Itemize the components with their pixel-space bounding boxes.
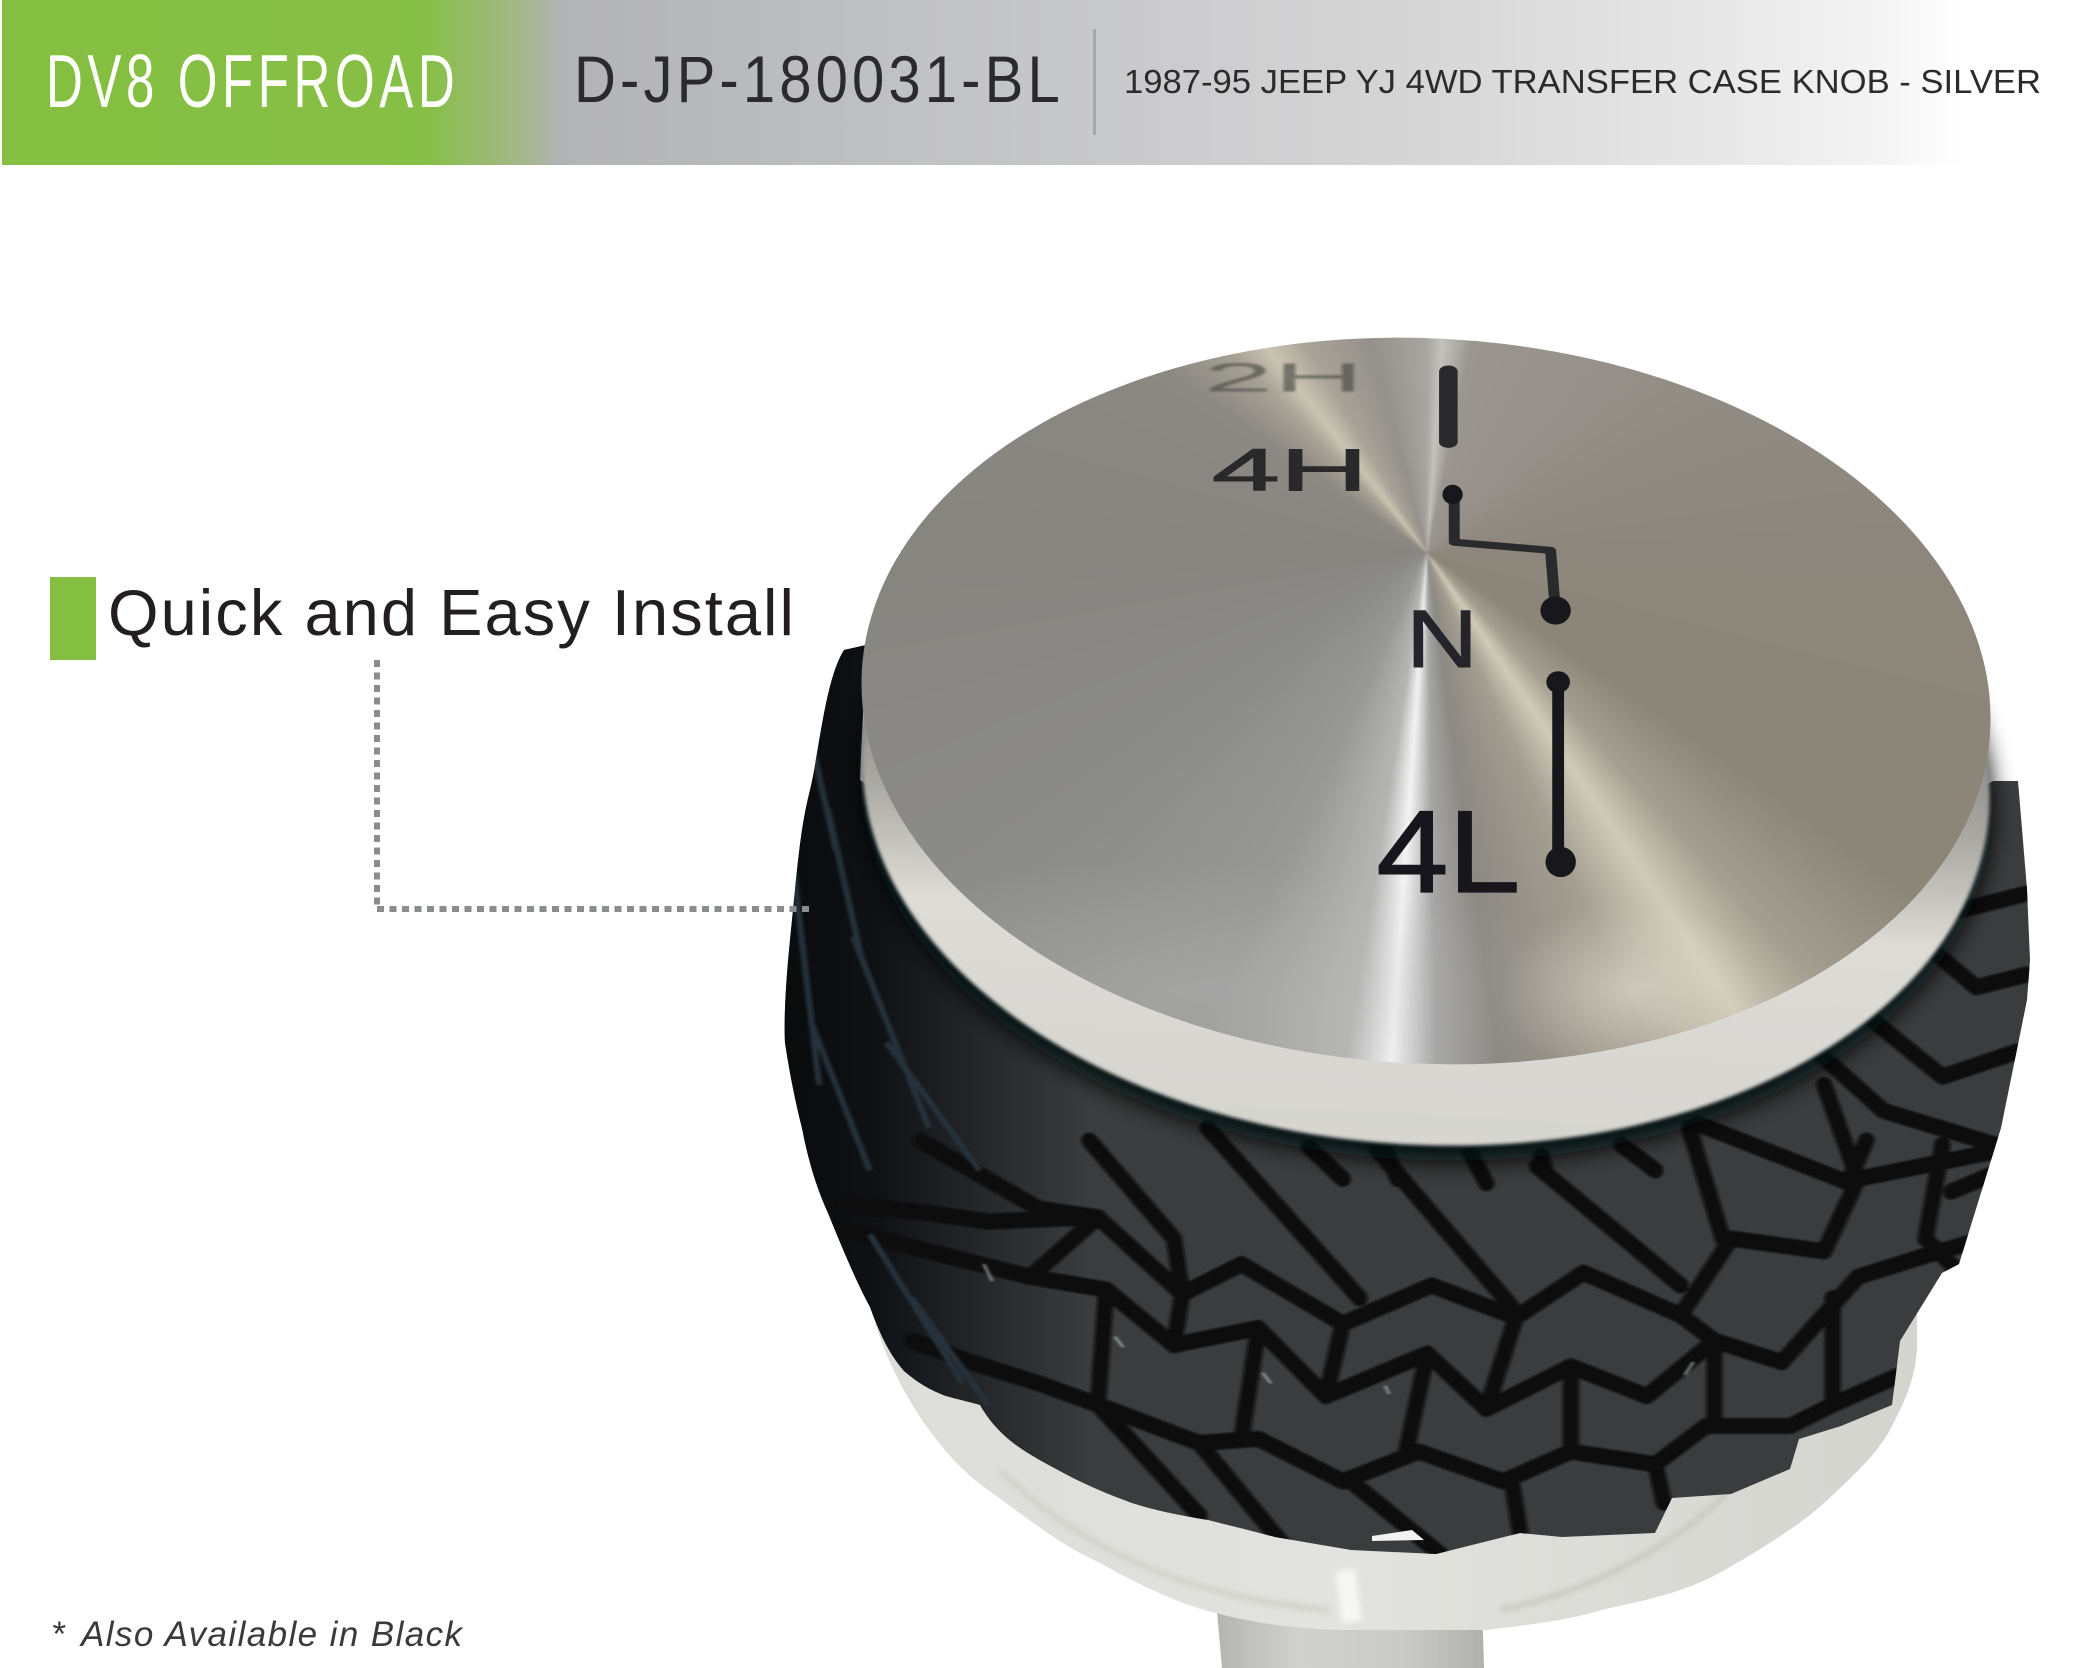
header divider — [1093, 29, 1096, 135]
feature callout: quick and easy install — [50, 576, 809, 912]
label: 4H: 4H — [1212, 437, 1368, 504]
header banner — [2, 0, 2084, 165]
green marker — [50, 577, 96, 660]
tire body — [770, 640, 2050, 1570]
base glint — [1372, 1530, 1424, 1541]
tread grooves — [844, 894, 2027, 1554]
dotted leader line — [374, 660, 809, 912]
brushed metal top face — [855, 330, 2000, 1075]
stem — [1216, 1600, 1484, 1668]
label: 4L: 4L — [1377, 787, 1520, 917]
shift gate end points — [1442, 485, 1576, 877]
knob rim — [844, 386, 2008, 1174]
part number: D-JP-180031-BL — [574, 44, 1060, 117]
base highlights — [1000, 1470, 1730, 1622]
footnote: Also Available in Black — [79, 1615, 464, 1654]
sidewall ridges — [794, 702, 988, 1405]
product title: 1987-95 JEEP YJ 4WD TRANSFER CASE KNOB - SILVER — [1124, 63, 2041, 100]
shift pattern engraving — [1203, 356, 1576, 917]
label: 2H: 2H — [1203, 356, 1364, 401]
tire with tread — [770, 640, 2050, 1570]
rim highlight — [1379, 1065, 1407, 1142]
left shaded side of tire — [784, 645, 1060, 1472]
brand name: DV8 OFFROAD — [46, 39, 455, 123]
label: N: N — [1406, 594, 1478, 684]
aluminium base — [870, 1300, 1917, 1630]
shift gate lines — [1448, 371, 1558, 867]
rim shadow — [842, 395, 2010, 1189]
product photo: transfer case knob lower body — [784, 645, 2030, 1668]
tread glints — [984, 1264, 1693, 1394]
footnote: * — [51, 1615, 66, 1654]
callout text: Quick and Easy Install — [108, 576, 794, 649]
